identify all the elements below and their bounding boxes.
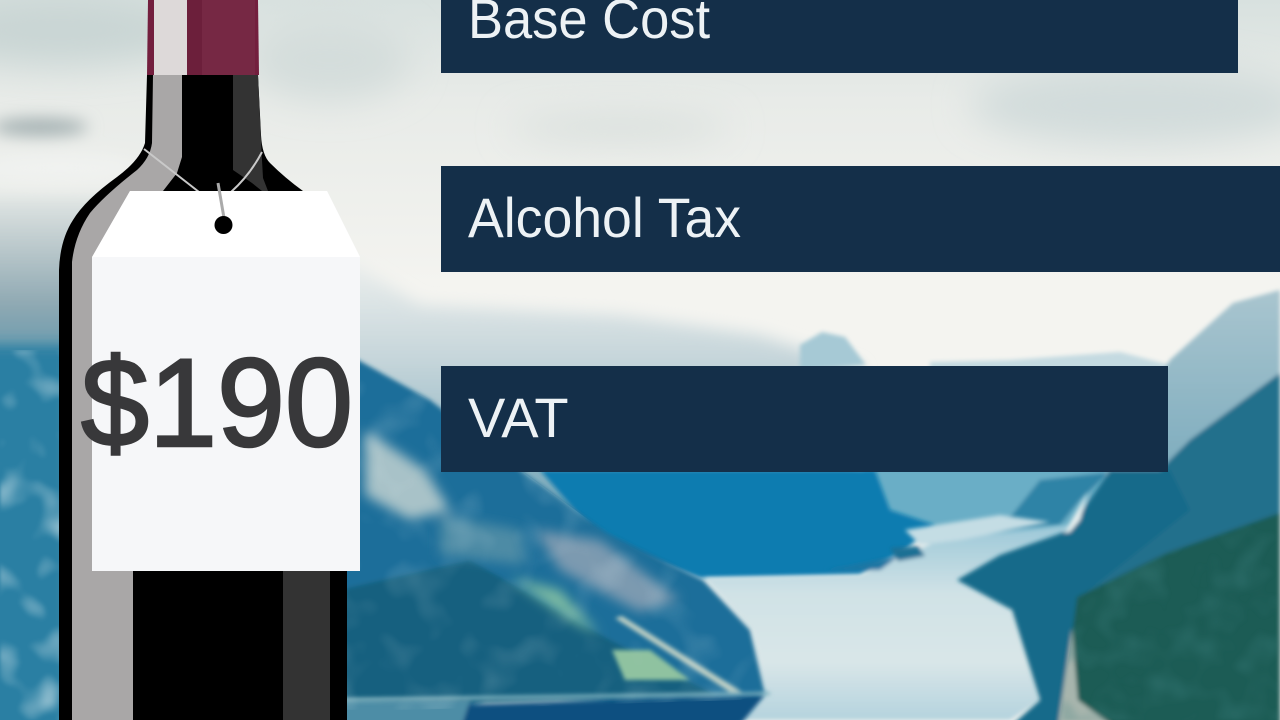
bottle foil capsule xyxy=(147,0,259,75)
tag string knot xyxy=(218,183,224,218)
right mountains xyxy=(957,290,1280,720)
distant mountains xyxy=(800,332,1170,545)
left fog bank xyxy=(0,195,130,365)
price tag xyxy=(81,183,360,571)
tag hole xyxy=(214,216,232,234)
left clouds xyxy=(0,118,140,182)
texture overlays xyxy=(0,350,1280,720)
mountain patches xyxy=(365,430,680,635)
price: $190 xyxy=(81,334,353,473)
tag string xyxy=(144,149,262,192)
bottle body xyxy=(59,75,347,720)
bar: base cost xyxy=(441,0,1238,73)
central ridge fog xyxy=(340,255,860,520)
bar: alcohol tax: Alcohol Tax xyxy=(468,186,741,248)
bar: VAT xyxy=(441,366,1168,472)
farm field and shoreline xyxy=(340,616,770,702)
left mountain slope xyxy=(340,350,765,720)
deep blue mountain behind lake xyxy=(540,470,935,578)
lake xyxy=(700,515,1070,720)
lower left mountain xyxy=(0,345,70,720)
bar: alcohol tax xyxy=(441,166,1280,272)
bar: VAT: VAT xyxy=(468,386,569,449)
